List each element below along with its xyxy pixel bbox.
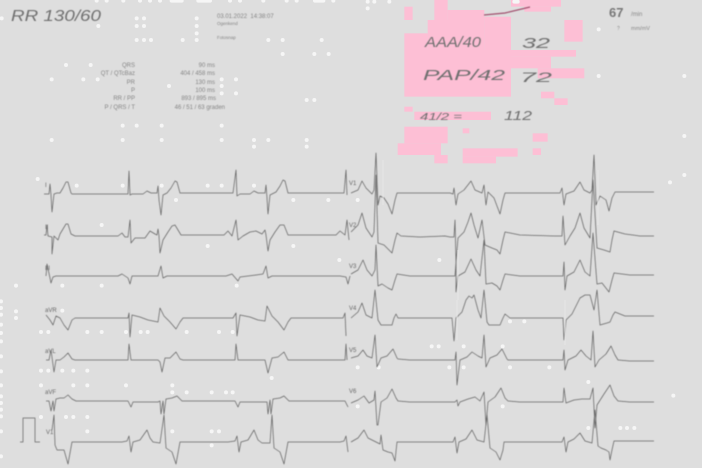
lead aVR — [45, 306, 346, 337]
lead V1 left — [46, 415, 348, 464]
lead aVF — [45, 390, 348, 414]
lead V1 left: V1 — [46, 430, 54, 436]
recording date and patient info: 03.01.2022 14:38:07 — [217, 14, 274, 20]
lead II — [44, 220, 349, 254]
lead aVR: aVR — [45, 308, 57, 314]
interval labels: RR / PP — [113, 96, 135, 102]
handwritten blood pressure note: RR 130/60 — [11, 8, 101, 25]
lead V1 lower right — [351, 410, 654, 461]
lead aVL: aVL — [45, 349, 56, 355]
recording date and patient info: Ogenkend — [217, 21, 238, 26]
handwritten note: first measurement: 32 — [522, 35, 551, 52]
lead V3: V3 — [349, 264, 357, 270]
interval labels: QRS — [122, 63, 135, 69]
lead aVF: aVF — [45, 390, 56, 396]
lead aVL — [45, 344, 347, 373]
lead II: II — [45, 225, 49, 231]
interval values: 404 / 458 ms — [180, 71, 215, 77]
handwritten note: first measurement — [424, 34, 551, 52]
lead III: III — [45, 266, 50, 272]
lead V2 — [349, 175, 654, 262]
lead I — [44, 170, 347, 215]
interval values: 893 / 895 ms — [181, 96, 216, 102]
lead V6 — [349, 385, 654, 428]
lead V4 — [349, 290, 654, 341]
lead V2: V2 — [349, 223, 357, 229]
lead V3 — [349, 233, 654, 292]
interval values: 90 ms — [199, 63, 215, 69]
handwritten note: third measurement: 41/2 = — [420, 112, 462, 123]
lead V5 — [349, 331, 654, 385]
handwritten note: third measurement — [420, 108, 533, 123]
interval values: 130 ms — [195, 80, 215, 86]
lead V1 right: V1 — [349, 181, 357, 187]
interval values: 100 ms — [195, 88, 215, 94]
heart rate: ? — [617, 26, 620, 32]
heart rate: mm/mV — [631, 26, 650, 32]
handwritten note: second measurement: PAP/42 — [423, 67, 506, 84]
recording date and patient info — [217, 14, 274, 40]
signal dropout highlights — [383, 160, 598, 345]
lead V6: V6 — [349, 389, 357, 395]
handwritten note: third measurement: 112 — [504, 108, 533, 123]
lead V1 right — [349, 153, 654, 214]
panel: pink highlight behind handwritten notes — [398, 0, 584, 163]
interval labels: P / QRS / T — [105, 105, 135, 111]
interval labels: P — [131, 88, 135, 94]
recording date and patient info: Fotosnap — [217, 35, 236, 40]
underline stroke — [484, 7, 530, 15]
heart rate: /min — [631, 12, 642, 18]
heart rate: 67 — [609, 5, 623, 20]
interval values — [175, 63, 225, 111]
handwritten note: second measurement: 72 — [520, 69, 552, 85]
interval values: 46 / 51 / 63 graden — [175, 105, 225, 111]
lead III — [45, 264, 350, 284]
interval labels — [101, 63, 136, 111]
handwritten note: first measurement: AAA/40 — [424, 34, 482, 51]
lead V5: V5 — [349, 348, 357, 354]
handwritten note: second measurement — [423, 67, 552, 85]
interval labels: QT / QTcBaz — [101, 71, 135, 77]
heart rate — [609, 5, 650, 32]
lead I: I — [45, 183, 47, 189]
lead V4: V4 — [349, 306, 357, 312]
calibration pulse — [20, 418, 40, 442]
interval labels: PR — [127, 80, 136, 86]
